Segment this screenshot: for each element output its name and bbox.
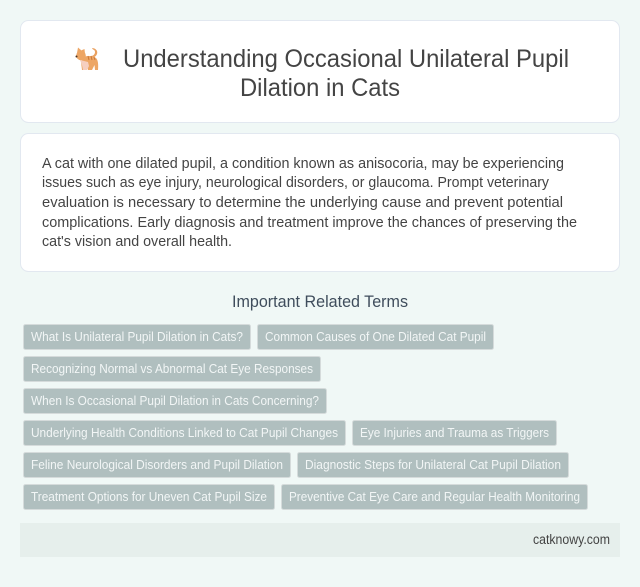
tag	[258, 324, 494, 350]
title: Understanding Occasional Unilateral Pupil	[123, 45, 569, 73]
tag: Treatment Options for Uneven Cat Pupil Size	[31, 490, 267, 504]
tag: Recognizing Normal vs Abnormal Cat Eye Responses	[31, 362, 313, 376]
heading: related terms: Important Related Terms	[232, 293, 408, 311]
footer: catknowy.com	[533, 532, 610, 547]
tag	[24, 356, 320, 382]
tag: What Is Unilateral Pupil Dilation in Cats?	[31, 330, 243, 344]
tag	[24, 388, 326, 414]
tag	[24, 420, 346, 446]
panel: description card	[20, 134, 620, 272]
description text	[42, 155, 577, 250]
tag: Underlying Health Conditions Linked to Cat Pupil Changes	[31, 426, 338, 440]
tag: Diagnostic Steps for Unilateral Cat Pupil Dilation	[305, 458, 561, 472]
tag: Preventive Cat Eye Care and Regular Health Monitoring	[289, 490, 580, 504]
title: Dilation in Cats	[240, 74, 400, 102]
description text: cat's vision and overall health.	[42, 233, 232, 250]
footer	[20, 523, 620, 557]
tag	[298, 452, 568, 478]
tag: Eye Injuries and Trauma as Triggers	[360, 426, 549, 440]
tag: Feline Neurological Disorders and Pupil Dilation	[31, 458, 283, 472]
tag	[24, 452, 290, 478]
tag: Common Causes of One Dilated Cat Pupil	[265, 330, 486, 344]
description text: complications. Early diagnosis and treatment improve the chances of preserving the	[42, 214, 577, 231]
tag: When Is Occasional Pupil Dilation in Cats Concerning?	[31, 394, 319, 408]
icon: cat	[76, 48, 98, 70]
description text: A cat with one dilated pupil, a condition known as anisocoria, may be experiencing	[42, 155, 564, 172]
title	[123, 45, 569, 102]
tag	[24, 484, 274, 510]
description text: issues such as eye injury, neurological disorders, or glaucoma. Prompt veterinary	[42, 174, 549, 191]
description text: evaluation is necessary to determine the underlying cause and prevent potential	[42, 194, 563, 211]
tag	[282, 484, 588, 510]
tag list	[24, 324, 588, 510]
panel: title card	[20, 20, 620, 122]
tag	[24, 324, 250, 350]
tag	[352, 420, 556, 446]
